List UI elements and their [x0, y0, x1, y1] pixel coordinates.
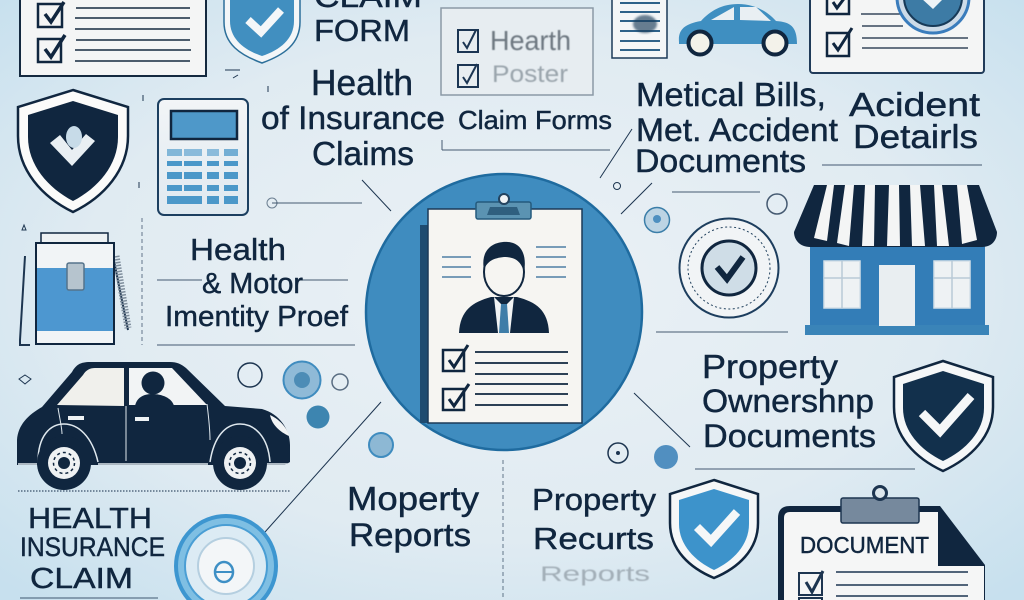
icon: storefront: [794, 185, 997, 335]
icon: round blue seal: [176, 516, 276, 600]
icon: calculator: [158, 99, 248, 215]
driver: [135, 372, 174, 406]
person portrait: [459, 242, 549, 333]
form: health poster card: Poster: [492, 61, 568, 88]
heading: property recurts: [532, 482, 657, 556]
heading: accident details: Acident: [849, 86, 980, 123]
heading: property recurts: Recurts: [533, 521, 654, 556]
heading: property ownership documents: Documents: [703, 418, 876, 454]
heading: medical bills and accident documents: Met. Accident: [636, 112, 838, 148]
heading: health insurance claim: HEALTH: [28, 503, 152, 535]
heading: health of insurance claims: Health: [311, 62, 413, 103]
calculator keys: [167, 149, 238, 204]
heading: accident details: [849, 86, 980, 155]
clipboard clip: [841, 486, 919, 523]
awning: [794, 185, 997, 247]
clipboard paper: [420, 194, 582, 423]
heading: property recurts: Property: [532, 482, 657, 517]
heading: property ownership documents: Ownershnp: [702, 383, 874, 419]
heading: health insurance claim: CLAIM: [30, 563, 133, 595]
building: [810, 246, 985, 326]
form: top right checklist with badge: [810, 0, 984, 73]
heading: health of insurance claims: Claims: [312, 135, 414, 172]
decorative blue dots: [284, 208, 678, 469]
wheels: [37, 436, 267, 490]
heading: accident details: Detairls: [853, 118, 978, 155]
heading: health insurance claim: [20, 503, 165, 595]
heading: health of insurance claims: [261, 62, 445, 172]
icon: folder with clasp: [20, 233, 128, 345]
document label: DOCUMENT: [800, 532, 929, 558]
badge: [897, 0, 969, 33]
icon: blue shield with check: [670, 480, 758, 578]
heading: health insurance claim: INSURANCE: [20, 532, 165, 562]
icon: blue shield top: [224, 0, 300, 63]
heading: claim form: FORM: [314, 13, 410, 48]
heading: medical bills and accident documents: Metical Bills,: [636, 76, 826, 113]
form: top left checklist: [20, 0, 206, 76]
heading: moperty reports: [347, 480, 480, 553]
heading: property ownership documents: Property: [702, 348, 839, 385]
heading: medical bills and accident documents: [635, 76, 838, 179]
document card bottom right: [778, 486, 985, 600]
heading: health and motor identity proof: & Motor: [202, 268, 303, 300]
icon: dark shield with check: [18, 90, 128, 212]
heading: health and motor identity proof: Health: [190, 232, 286, 267]
heading: health and motor identity proof: [165, 232, 349, 333]
heading: health of insurance claims: of Insurance: [261, 100, 445, 136]
form lines: [75, 8, 191, 61]
heading: health and motor identity proof: Imentity Proef: [165, 301, 349, 333]
center circle: [366, 174, 642, 450]
form: health poster card: Hearth: [490, 25, 571, 56]
heading: moperty reports: Reports: [349, 517, 471, 553]
checkboxes: [38, 2, 65, 62]
clip: [476, 202, 531, 219]
icon: blue car: [679, 4, 797, 54]
heading: property ownership documents: [702, 348, 876, 454]
document lines: [836, 572, 968, 596]
checklist: [443, 345, 568, 410]
form: health poster card: [441, 8, 593, 95]
portrait side lines: [442, 247, 566, 277]
document checkbox: [799, 571, 823, 600]
heading: moperty reports: Moperty: [347, 480, 480, 517]
icon: navy shield with check: [894, 361, 993, 471]
icon: check badge: [680, 218, 778, 318]
document sheet top: [612, 0, 667, 58]
faded text: reports: Reports: [540, 563, 650, 586]
icon: dark car with driver: [17, 362, 290, 490]
heading: medical bills and accident documents: Documents: [635, 143, 806, 179]
windows: [57, 368, 124, 406]
text: claim forms: Claim Forms: [458, 105, 612, 135]
heading: claim form: [314, 0, 422, 48]
